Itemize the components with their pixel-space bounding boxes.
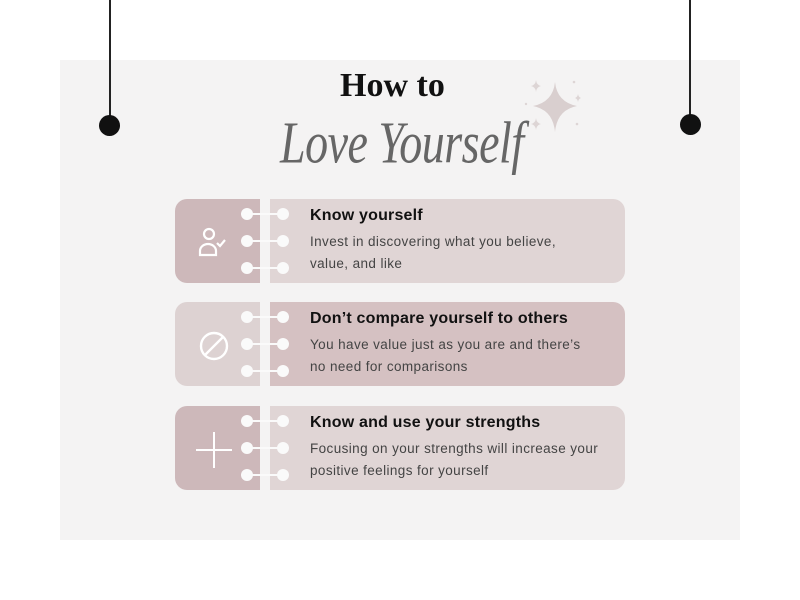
title: How to: How to [340,67,445,104]
icon: prohibited [200,332,228,360]
hanging dot right [680,114,701,135]
card 1: Know yourself [175,199,625,283]
hanging dot left [99,115,120,136]
icon: sparkles [524,80,580,131]
background panel [60,60,740,540]
text: positive feelings for yourself [310,463,489,478]
title: Love Yourself: Love Yourself [280,109,524,176]
text [310,337,580,374]
text: no need for comparisons [310,359,468,374]
text: Invest in discovering what you believe, [310,234,556,249]
icon: person check [198,228,226,256]
heading: Know and use your strengths [310,414,540,431]
text: Focusing on your strengths will increase your [310,441,598,456]
card 2: Don't compare [175,302,625,386]
card 3: strengths [175,406,625,490]
heading: Don’t compare yourself to others [310,310,568,327]
icon: plus [196,432,232,468]
text: value, and like [310,256,402,271]
heading: Know yourself [310,207,423,224]
text [310,234,556,271]
text: You have value just as you are and there’s [310,337,580,352]
hanging string left [109,0,111,118]
text [310,441,598,478]
hanging string right [689,0,691,118]
